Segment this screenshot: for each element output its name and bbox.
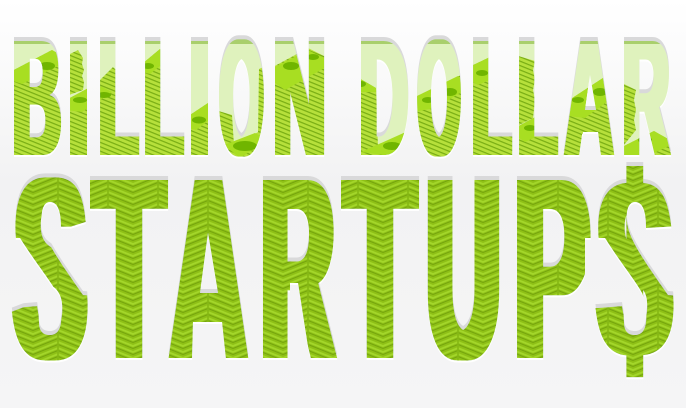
- top banknotes: [10, 49, 675, 158]
- heading line 2: STARTUP$ with chevron texture: [0, 160, 686, 390]
- pale sky fill of letters: [14, 40, 669, 146]
- heading line 1: BILLION DOLLAR with money stacks inside the letters: [14, 35, 672, 158]
- top inner shade band: [14, 39, 660, 44]
- banknote portraits: [39, 54, 652, 151]
- money stacks: [10, 48, 675, 160]
